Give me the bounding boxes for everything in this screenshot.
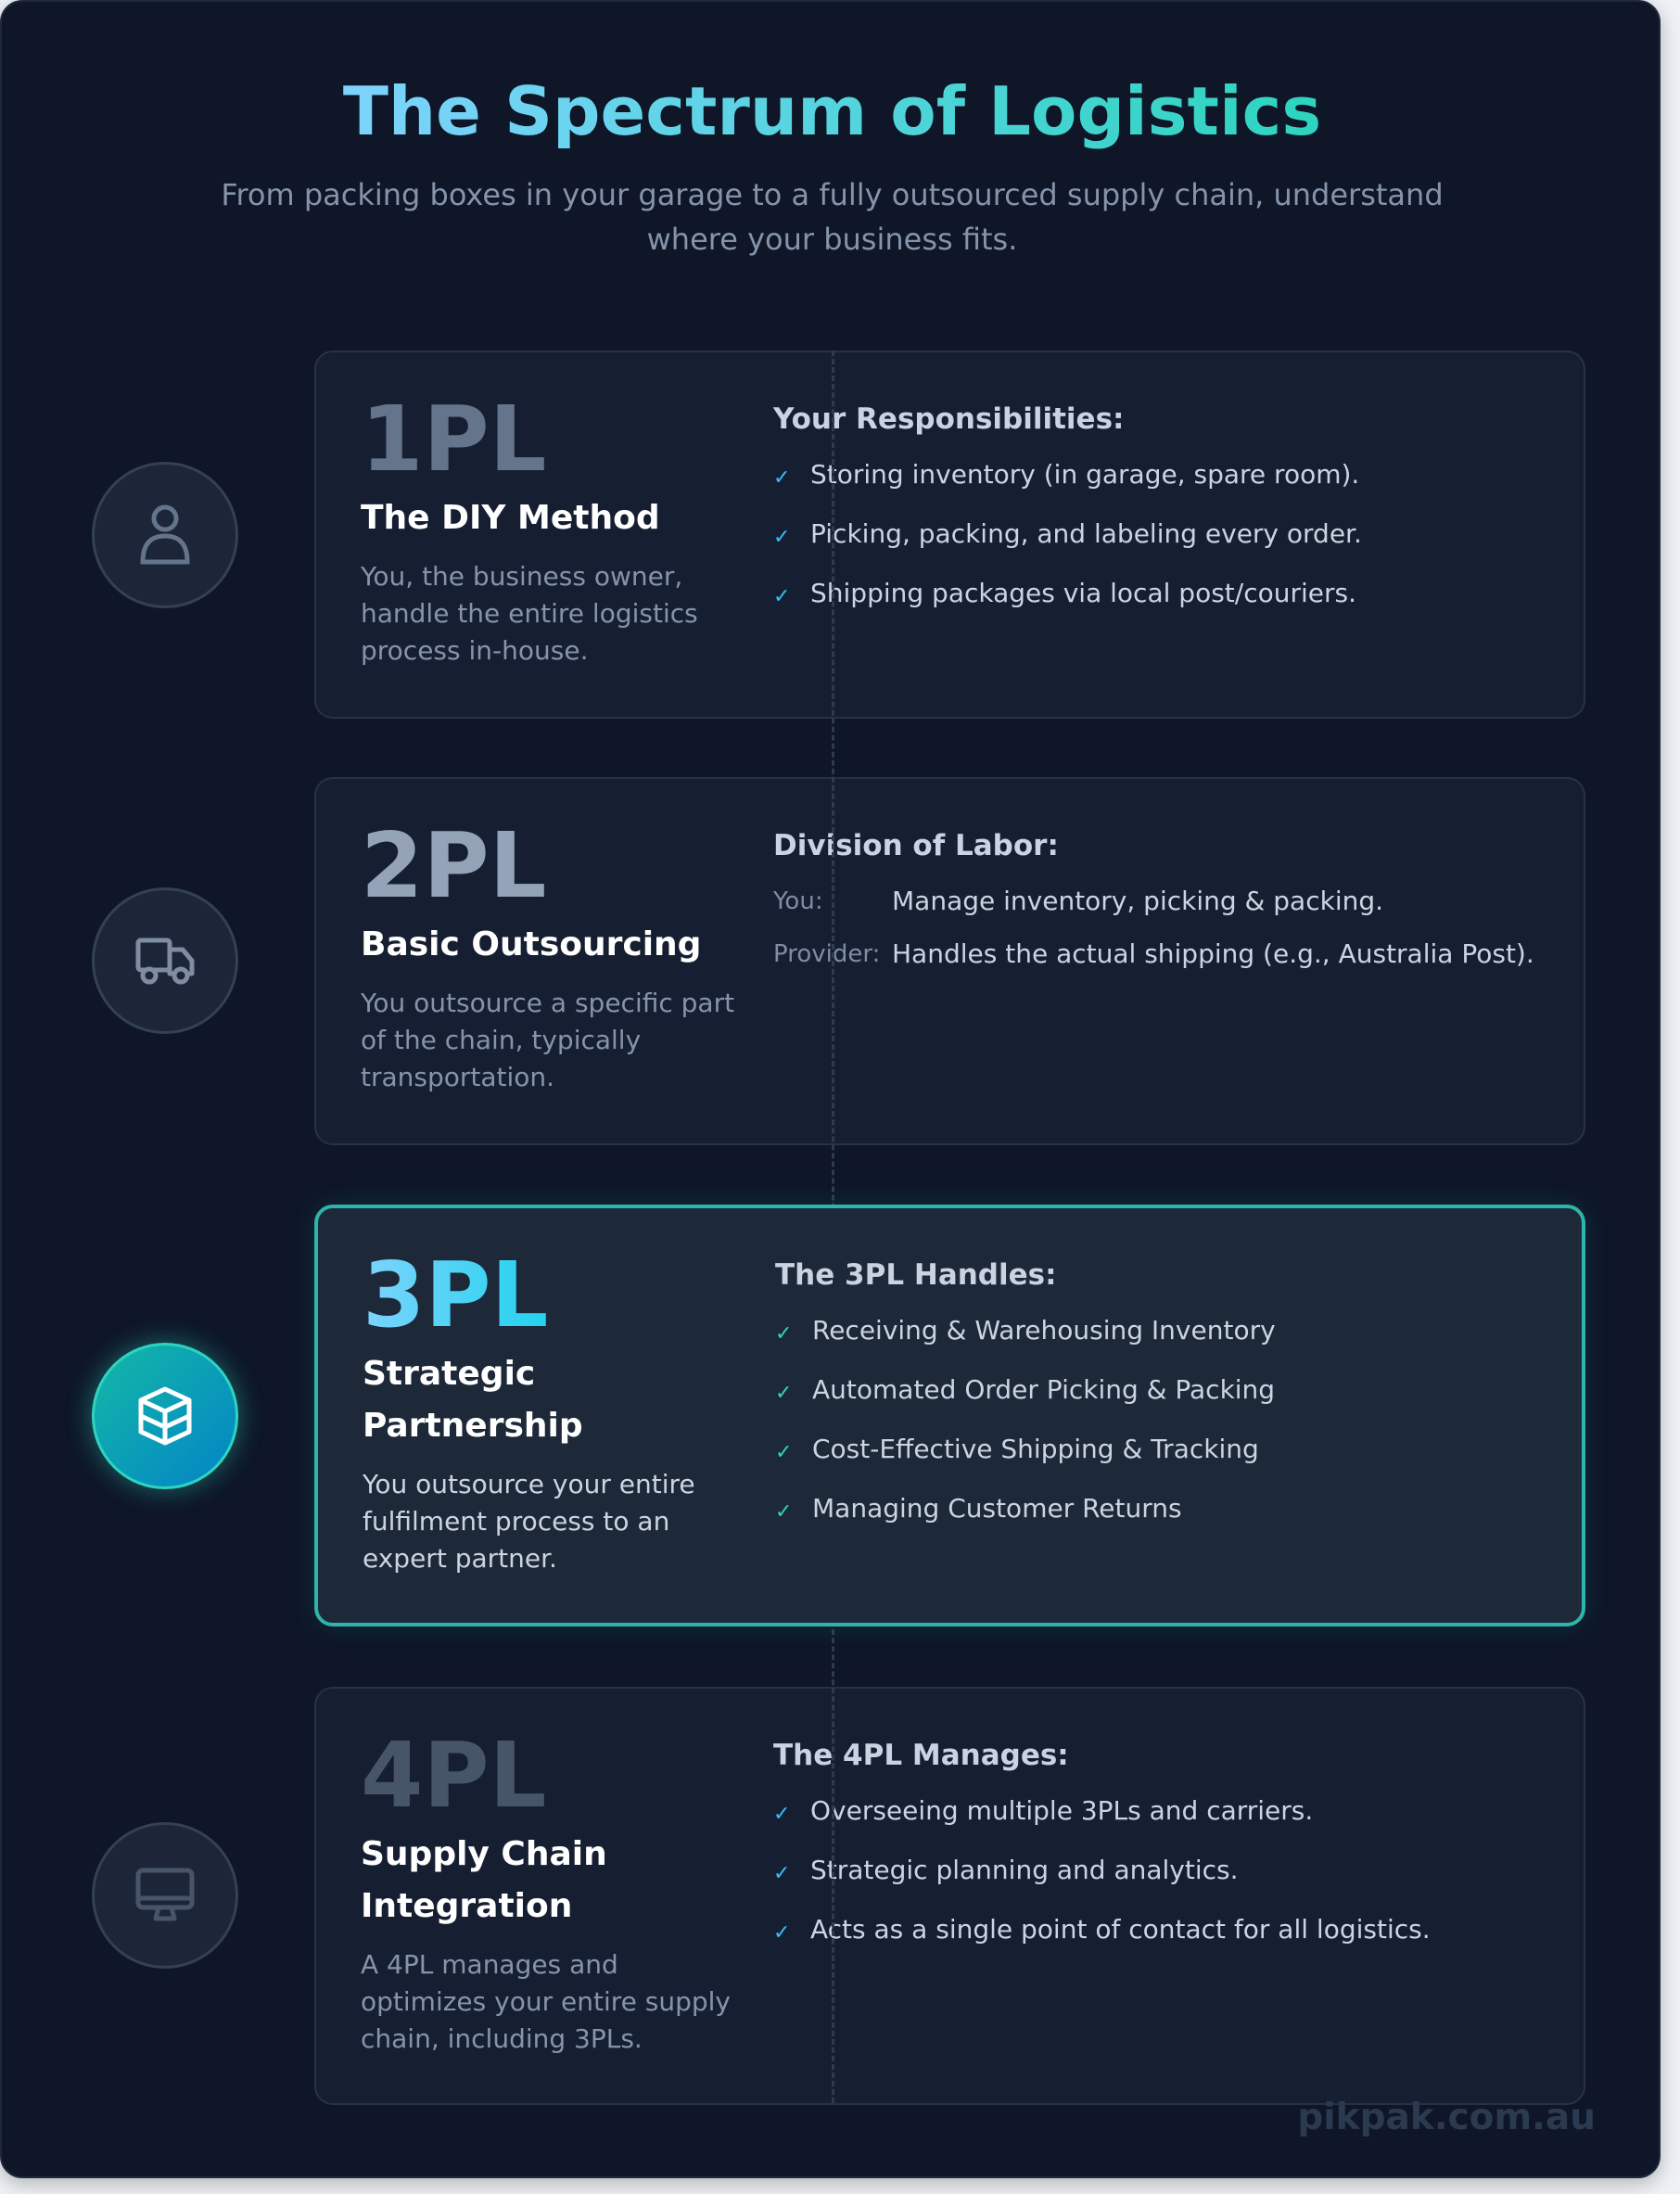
watermark: pikpak.com.au <box>1297 2097 1596 2138</box>
panel: 3PL: ✓ <box>775 1382 792 1405</box>
panel: 3PL: The 3PL Handles: <box>775 1258 1057 1292</box>
panel: 4PL: Acts as a single point of contact for all logistics. <box>810 1914 1431 1945</box>
panel: 3PL: Cost-Effective Shipping & Tracking <box>812 1434 1259 1464</box>
panel: 3PL: ✓ <box>775 1441 792 1464</box>
panel: 1PL: ✓ <box>773 466 790 490</box>
subtitle: From packing boxes in your garage to a fully outsourced supply chain, understand where your business fits. <box>221 177 1444 257</box>
panel: 2PL: You outsource a specific part of the chain, typically transportation. <box>361 988 734 1092</box>
panel: 3PL <box>314 1205 1585 1626</box>
panel: 2PL: Manage inventory, picking & packing. <box>892 886 1383 916</box>
panel: 2PL: Handles the actual shipping (e.g., Australia Post). <box>892 938 1534 969</box>
panel: 4PL: 4PL <box>361 1723 546 1828</box>
panel: 1PL: Shipping packages via local post/couriers. <box>810 578 1356 608</box>
panel: 2PL: You: <box>773 887 823 915</box>
panel: 1PL <box>314 351 1585 719</box>
icon: monitor <box>92 1822 238 1969</box>
panel: 4PL: The 4PL Manages: <box>773 1739 1069 1772</box>
panel: 4PL: Overseeing multiple 3PLs and carriers. <box>810 1795 1313 1826</box>
panel: 1PL: You, the business owner, handle the entire logistics process in-house. <box>361 561 698 666</box>
panel: 3PL: Strategic Partnership <box>363 1355 583 1445</box>
icon: person <box>92 462 238 608</box>
panel: 3PL: ✓ <box>775 1500 792 1524</box>
panel: 2PL: 2PL <box>361 813 546 918</box>
icon: box <box>92 1343 238 1489</box>
panel: 3PL: Managing Customer Returns <box>812 1493 1182 1524</box>
panel: 2PL <box>314 777 1585 1145</box>
panel: 2PL: Basic Outsourcing <box>361 925 701 963</box>
panel: 1PL: The DIY Method <box>361 499 660 537</box>
panel: 4PL: Supply Chain Integration <box>361 1835 607 1925</box>
panel: 4PL <box>314 1687 1585 2105</box>
panel: 4PL: ✓ <box>773 1803 790 1826</box>
panel: 4PL: ✓ <box>773 1921 790 1945</box>
icon: truck <box>92 887 238 1034</box>
title: The Spectrum of Logistics <box>343 72 1321 150</box>
panel: 3PL: 3PL <box>363 1243 548 1347</box>
panel: 4PL: Strategic planning and analytics. <box>810 1855 1239 1885</box>
panel: 4PL: A 4PL manages and optimizes your entire supply chain, including 3PLs. <box>361 1949 731 2054</box>
panel: 1PL: ✓ <box>773 526 790 549</box>
panel: 1PL: 1PL <box>361 387 546 491</box>
panel: 2PL: Division of Labor: <box>773 829 1059 862</box>
panel: 3PL: Automated Order Picking & Packing <box>812 1374 1275 1405</box>
dashed timeline <box>832 351 834 2103</box>
panel: 1PL: ✓ <box>773 585 790 608</box>
panel: 4PL: ✓ <box>773 1862 790 1885</box>
panel: 3PL: Receiving & Warehousing Inventory <box>812 1315 1276 1346</box>
panel: 1PL: Your Responsibilities: <box>773 402 1124 436</box>
panel: 3PL: ✓ <box>775 1322 792 1346</box>
panel: 2PL: Provider: <box>773 940 880 968</box>
panel: 3PL: You outsource your entire fulfilment process to an expert partner. <box>363 1469 695 1574</box>
panel: 1PL: Storing inventory (in garage, spare room). <box>810 459 1359 490</box>
panel: 1PL: Picking, packing, and labeling every order. <box>810 518 1362 549</box>
